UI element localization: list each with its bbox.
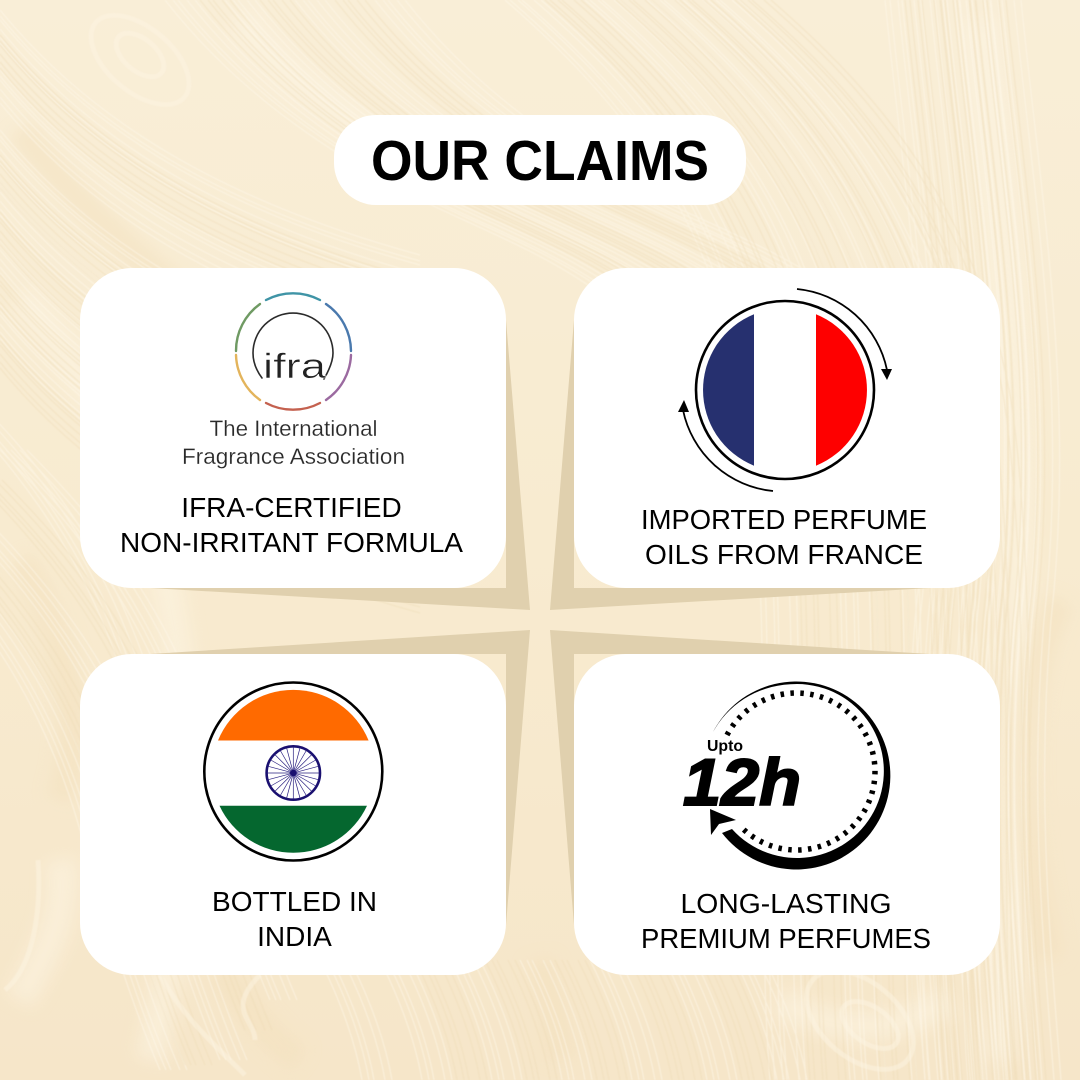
text: claim 2: OILS FROM FRANCE <box>645 539 923 570</box>
text: claim 2: IMPORTED PERFUME <box>641 504 927 535</box>
text: The International Fragrance Association <box>182 416 405 469</box>
icon: IFRA logo <box>236 293 351 410</box>
title: OUR CLAIMS <box>371 129 709 193</box>
icon: 12 hour clock <box>680 681 890 869</box>
text: claim 4 <box>641 888 931 954</box>
icon: 12 hour clock: 12h <box>683 745 801 819</box>
icon: French flag with arrows <box>678 289 892 491</box>
title pill <box>334 115 746 205</box>
panel: imported from France <box>574 268 1000 588</box>
icon: IFRA logo: ifra <box>263 347 327 386</box>
text: claim 1: IFRA-CERTIFIED <box>181 492 402 523</box>
text: The International Fragrance Association: Fragrance Association <box>182 444 405 469</box>
card shadow: long-lasting card <box>550 630 930 925</box>
card shadow: IFRA card <box>150 320 530 610</box>
text: claim 3: BOTTLED IN <box>212 886 377 917</box>
text: claim 2 <box>641 504 927 570</box>
card shadow: France card <box>550 320 930 610</box>
text: claim 1 <box>120 492 463 558</box>
text: The International Fragrance Association: The International <box>210 416 378 441</box>
panel: bottled in India <box>80 654 506 975</box>
icon: 12 hour clock: Upto <box>707 738 743 755</box>
text: claim 3: INDIA <box>257 921 332 952</box>
text: claim 3 <box>212 886 377 952</box>
icon: Indian flag <box>204 682 382 860</box>
panel: IFRA certified <box>80 268 506 588</box>
text: claim 4: LONG-LASTING <box>680 888 892 919</box>
text: claim 1: NON-IRRITANT FORMULA <box>120 527 463 558</box>
panel: long lasting <box>574 654 1000 975</box>
text: claim 4: PREMIUM PERFUMES <box>641 923 931 954</box>
card shadow: India card <box>150 630 530 925</box>
